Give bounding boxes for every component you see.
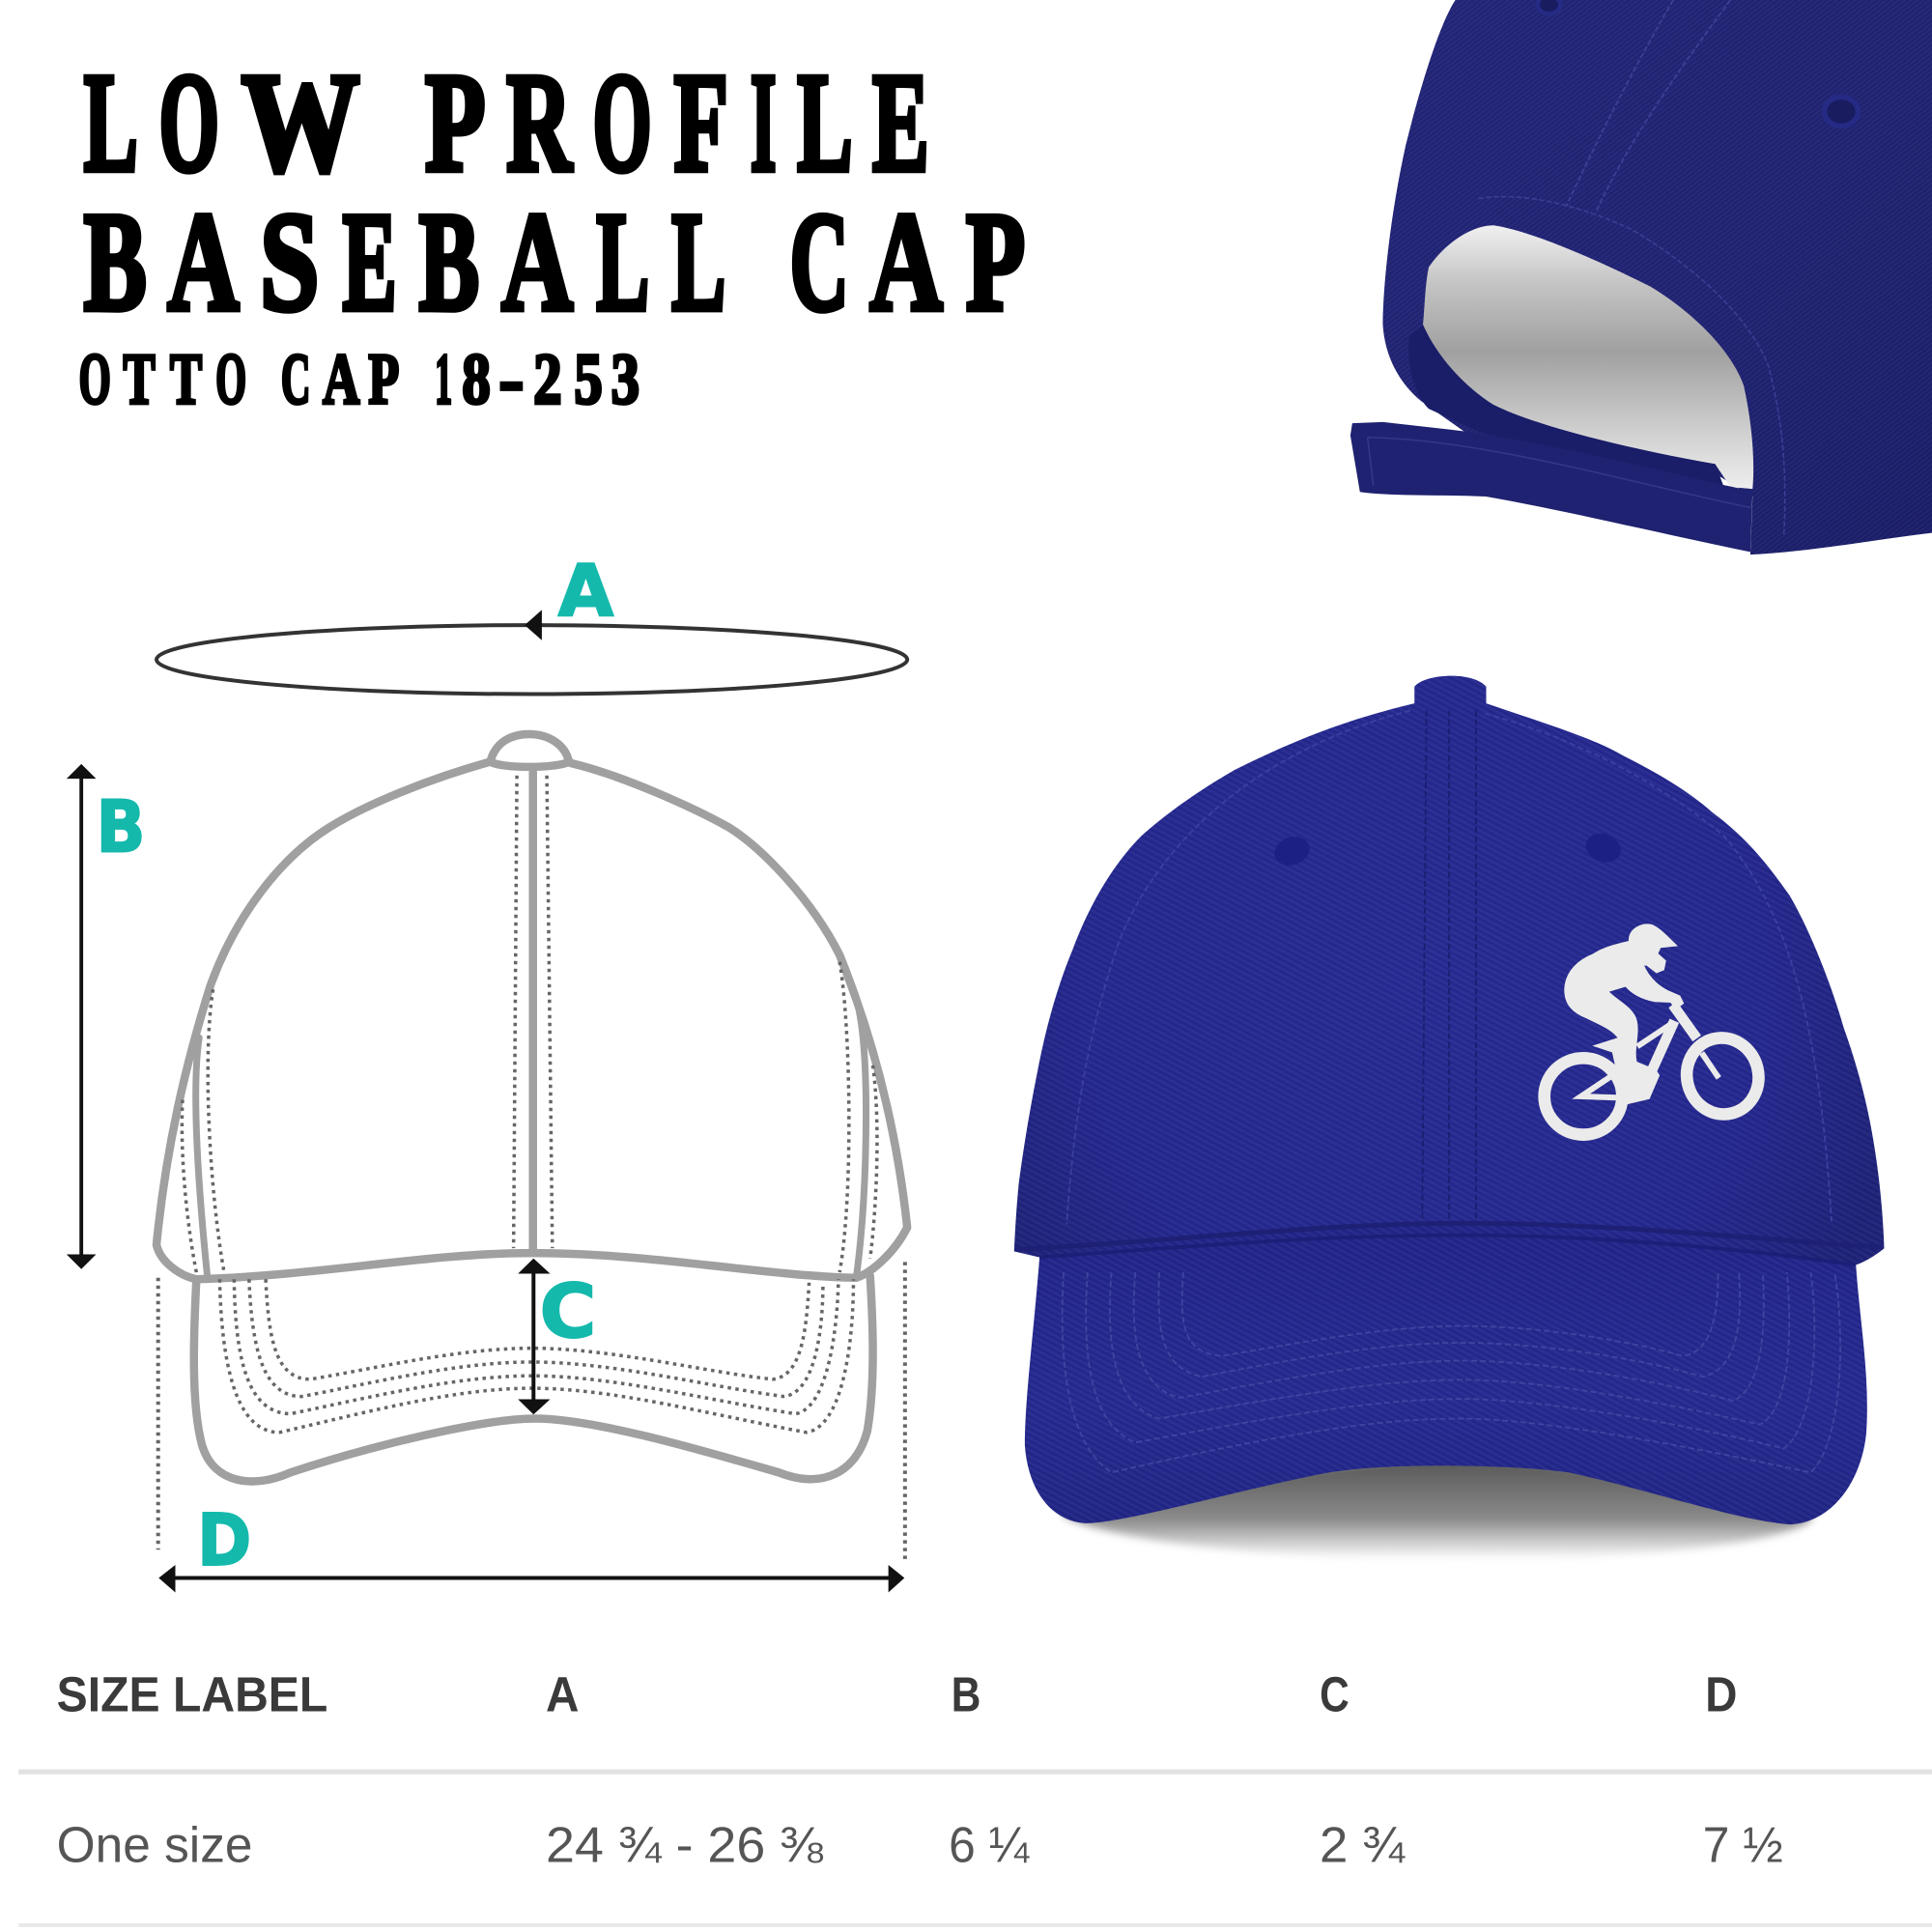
arrow A	[525, 610, 542, 640]
label C: C	[540, 1269, 596, 1355]
subtitle: 3	[611, 340, 639, 420]
eyelet left	[1270, 832, 1314, 870]
arrow D	[166, 1577, 897, 1580]
title line 2: E	[343, 183, 397, 340]
center seams	[1422, 711, 1476, 1218]
table row: 6 ¼	[949, 1817, 1030, 1873]
title line 2: B	[419, 183, 479, 340]
title line 2: A	[501, 183, 573, 340]
table header: A	[546, 1667, 579, 1722]
subtitle: 1	[435, 340, 452, 420]
title line 1: W	[242, 43, 359, 201]
sweatband lower edge	[1039, 1236, 1856, 1265]
visor outline	[194, 1276, 873, 1481]
title line 1: O	[159, 43, 219, 201]
table row: One size	[57, 1817, 252, 1873]
visor twill	[1025, 1212, 1867, 1524]
bike frame	[1652, 1005, 1697, 1070]
title line 2: C	[790, 183, 849, 340]
photo: cap front view	[1014, 676, 1884, 1559]
title line 1: E	[872, 43, 929, 201]
subtitle: T	[124, 340, 156, 420]
table row	[57, 1817, 1783, 1873]
panel stitching	[1066, 711, 1832, 1225]
embroidered cyclist logo	[1545, 925, 1767, 1135]
subtitle: 5	[574, 340, 603, 420]
subtitle: P	[368, 340, 399, 420]
crown twill	[1014, 676, 1884, 1265]
cap outline crown	[156, 762, 907, 1279]
inner band	[1408, 325, 1724, 489]
title line 1: L	[84, 43, 138, 201]
eyelet	[1825, 97, 1858, 126]
adjustable strap	[1350, 422, 1752, 552]
subtitle: C	[281, 340, 310, 420]
twill texture	[1383, 0, 1932, 554]
strap stitching	[1368, 438, 1752, 508]
label D: D	[197, 1499, 251, 1582]
subtitle: 2	[533, 340, 562, 420]
arrow C heads	[518, 1259, 551, 1414]
title line 1: P	[425, 43, 486, 201]
title line 1: I	[751, 43, 777, 201]
table row: 7 ½	[1703, 1817, 1783, 1873]
visor stitching	[1063, 1272, 1840, 1472]
title line 2: P	[966, 183, 1025, 340]
subtitle: -	[499, 340, 524, 420]
arrow B	[67, 764, 96, 1269]
brim shadow	[1061, 1458, 1813, 1559]
side seams	[196, 1010, 867, 1278]
bike tubes	[1581, 1024, 1719, 1098]
title line 1: L	[797, 43, 853, 201]
table header: SIZE LABEL	[57, 1667, 327, 1722]
crown	[1014, 676, 1884, 1265]
title line 1: O	[593, 43, 652, 201]
title line 2: L	[671, 183, 725, 340]
visor dotted stitching	[219, 1279, 853, 1433]
title line 2: B	[84, 183, 147, 340]
title line 1: R	[506, 43, 573, 201]
table header	[57, 1667, 1737, 1722]
table header: C	[1320, 1667, 1350, 1722]
table header: B	[952, 1667, 980, 1722]
sweatband piping	[1016, 1223, 1883, 1250]
eyelet	[1538, 0, 1560, 14]
width guide dotted lines	[158, 1262, 905, 1562]
title line 2: A	[870, 183, 943, 340]
subtitle: O	[215, 340, 246, 420]
size table	[18, 1667, 1932, 1927]
title line 1: F	[674, 43, 728, 201]
rider silhouette	[1566, 925, 1683, 1103]
subtitle: A	[323, 340, 359, 420]
title line 2: A	[167, 183, 239, 340]
eyelet right	[1581, 829, 1625, 867]
size diagram	[156, 610, 907, 1593]
subtitle: 8	[462, 340, 491, 420]
front wheel	[1678, 1030, 1767, 1122]
table header: D	[1705, 1667, 1737, 1722]
rear wheel	[1545, 1058, 1622, 1135]
panel seams	[1566, 0, 1730, 210]
subtitle: T	[170, 340, 202, 420]
photo: cap rear view	[1350, 0, 1932, 554]
table row: 2 ¾	[1320, 1817, 1406, 1873]
visor	[1025, 1212, 1867, 1524]
arrow D heads	[158, 1565, 904, 1593]
label A: A	[558, 551, 613, 634]
cap rear body	[1383, 0, 1932, 554]
center seam	[528, 772, 537, 1252]
title line 2: S	[260, 183, 319, 340]
panel dotted stitching	[182, 776, 877, 1272]
arrow C	[531, 1262, 535, 1409]
title	[84, 43, 1025, 340]
head circumference ellipse	[156, 625, 907, 695]
label B: B	[96, 785, 146, 868]
opening	[1423, 225, 1753, 489]
title line 2: L	[596, 183, 649, 340]
top button	[491, 734, 569, 767]
opening stitching	[1478, 197, 1785, 535]
table row: 24 ¾ - 26 ⅜	[546, 1817, 823, 1873]
subtitle: O	[79, 340, 111, 420]
